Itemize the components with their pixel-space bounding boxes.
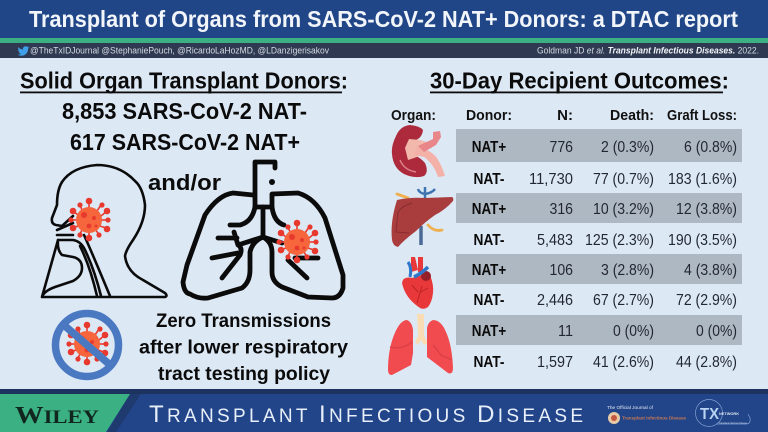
table: liver rows: NAT- (474, 232, 504, 249)
icon: heart (402, 257, 433, 309)
table: kidney rows (472, 139, 737, 188)
tx network logo: NETWORK (719, 411, 739, 416)
table: kidney rows: NAT+ (472, 139, 506, 156)
table: heart rows (472, 262, 737, 309)
table: lung rows (472, 323, 737, 371)
official journal of: Transplant Infectious Disease (622, 416, 686, 420)
icon: liver (392, 187, 453, 247)
table row shading (456, 129, 742, 345)
icon: virus on lung (277, 220, 318, 262)
wiley logo: WILEY (15, 403, 99, 429)
official journal of: The Official Journal of (607, 405, 654, 410)
table: liver rows: 125 (2.3%) (585, 232, 654, 249)
table: lung rows: 41 (2.6%) (593, 354, 654, 371)
table: heart rows: NAT+ (472, 262, 506, 279)
table: heart rows: 72 (2.9%) (676, 292, 737, 309)
icon: head with upper airway and virus (42, 165, 166, 297)
table column headers (391, 107, 737, 124)
table: liver rows: 5,483 (537, 232, 573, 249)
table: heart rows: 3 (2.8%) (601, 262, 654, 279)
footer banner (0, 389, 768, 432)
table: liver rows (472, 201, 737, 249)
donor counts (62, 98, 307, 155)
table column headers: Organ: (391, 107, 436, 124)
icon: lungs organ (388, 314, 453, 375)
citation: Goldman JD et al. Transplant Infectious Diseases. 2022. (537, 46, 759, 56)
table: liver rows: 10 (3.2%) (593, 201, 654, 218)
tx network logo (696, 400, 750, 426)
and/or label: and/or (148, 170, 221, 195)
table: kidney rows: 11,730 (529, 171, 573, 188)
zero transmissions text (139, 311, 348, 385)
table: lung rows: 44 (2.8%) (676, 354, 737, 371)
table: lung rows: 0 (0%) (696, 323, 737, 340)
icon: no virus sign (56, 314, 118, 376)
table: liver rows: NAT+ (472, 201, 506, 218)
table: liver rows: 190 (3.5%) (668, 232, 737, 249)
heading: solid organ transplant donors: Solid Organ Transplant Donors: (20, 68, 348, 94)
table column headers: Death: (610, 107, 654, 124)
header banner (0, 0, 768, 58)
icon: lungs with virus (183, 162, 343, 298)
table: kidney rows: 6 (0.8%) (684, 139, 737, 156)
zero transmissions text: tract testing policy (158, 364, 330, 385)
table: heart rows: 2,446 (537, 292, 573, 309)
table: kidney rows: 77 (0.7%) (593, 171, 654, 188)
table: heart rows: 106 (550, 262, 573, 279)
tx network logo: Transplant Infectious Disease (719, 422, 748, 425)
zero transmissions text: Zero Transmissions (156, 311, 331, 332)
table: lung rows: 0 (0%) (613, 323, 654, 340)
journal name: TRANSPLANT INFECTIOUS DISEASE (149, 401, 583, 428)
table: lung rows: NAT- (474, 354, 504, 371)
table: lung rows: 11 (558, 323, 573, 340)
icon: twitter bird (18, 46, 29, 56)
table: kidney rows: 2 (0.3%) (601, 139, 654, 156)
table: kidney rows: 776 (550, 139, 573, 156)
icon: kidney (392, 125, 445, 177)
table: liver rows: 316 (550, 201, 573, 218)
table: heart rows: NAT- (474, 292, 504, 309)
table column headers: Graft Loss: (667, 107, 737, 124)
table: heart rows: 67 (2.7%) (593, 292, 654, 309)
icon: virus on head (69, 198, 110, 240)
tx network logo: TX (700, 406, 719, 423)
zero transmissions text: after lower respiratory (139, 338, 348, 358)
official journal of (607, 405, 686, 424)
table: lung rows: 1,597 (537, 354, 573, 371)
table: lung rows: NAT+ (472, 323, 506, 340)
table column headers: Donor: (466, 107, 512, 124)
donor counts: 8,853 SARS-CoV-2 NAT- (62, 98, 307, 124)
heading: 30-day recipient outcomes: 30-Day Recipient Outcomes: (430, 68, 729, 94)
twitter handles: @TheTxIDJournal @StephaniePouch, @RicardoLaHozMD, @LDanzigerisakov (30, 46, 329, 56)
donor counts: 617 SARS-CoV-2 NAT+ (70, 129, 300, 155)
table: kidney rows: NAT- (474, 171, 504, 188)
table: liver rows: 12 (3.8%) (676, 201, 737, 218)
table: kidney rows: 183 (1.6%) (668, 171, 737, 188)
table column headers: N: (557, 107, 573, 124)
table: heart rows: 4 (3.8%) (684, 262, 737, 279)
